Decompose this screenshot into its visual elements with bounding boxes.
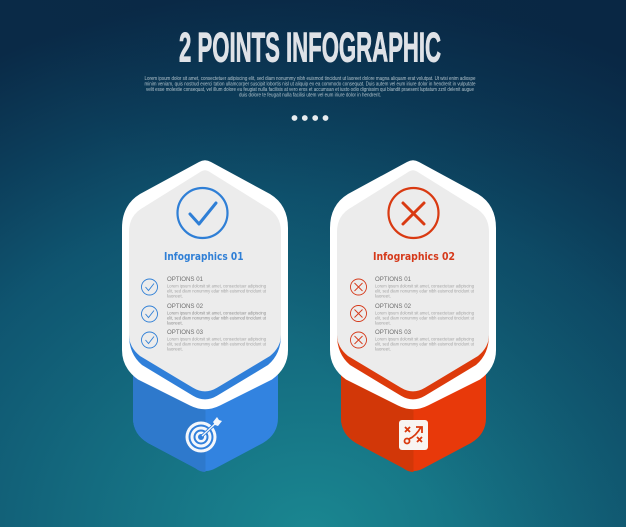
option 01: OPTIONS 01	[375, 276, 412, 283]
option 03	[142, 329, 267, 352]
option 03: laoreet.	[167, 346, 183, 352]
option 01	[142, 276, 267, 300]
option 01: Lorem ipsum dolorsit sit amet, consectetuer adipiscing	[167, 284, 266, 290]
option 02: Lorem ipsum dolorsit sit amet, consectetuer adipiscing	[375, 310, 474, 316]
option 01: laoreet.	[167, 294, 183, 300]
grey content panel	[337, 170, 489, 391]
option 03	[350, 329, 475, 352]
option 02: laoreet.	[167, 320, 183, 326]
option 02: OPTIONS 02	[375, 303, 412, 310]
white hexagon frame	[122, 160, 288, 409]
option 03: elit, sed diam nonummy edar nibh euismod tincidunt ut	[167, 342, 267, 348]
option 01	[350, 276, 475, 300]
option 02: laoreet.	[375, 320, 391, 326]
heading: Infographics 01	[164, 251, 244, 263]
option 03: Lorem ipsum dolorsit sit amet, consectetuer adipiscing	[375, 336, 474, 342]
intro paragraph: minim veniam, quis nostrud exerci tation ullamcorper suscipit lobortis nisl ut aliquip ex ea commodo consequat. Duis autem vel eum iriure dolor in hendrerit in vulputate	[144, 82, 476, 88]
icon: big cross circle	[388, 188, 438, 238]
blue base tab	[133, 340, 278, 472]
option 03: OPTIONS 03	[167, 329, 204, 336]
white hexagon frame	[330, 160, 496, 409]
option 01: Lorem ipsum dolorsit sit amet, consectetuer adipiscing	[375, 284, 474, 290]
red base tab	[341, 340, 486, 472]
option 01: elit, sed diam nonummy edar nibh euismod tincidunt ut	[167, 288, 267, 294]
heading: Infographics 02	[373, 251, 455, 263]
option 02: elit, sed diam nonummy edar nibh euismod tincidunt ut	[167, 316, 267, 322]
grey content panel	[129, 170, 281, 391]
option 02	[142, 303, 267, 326]
intro paragraph: velit esse molestie consequat, vel illum dolore eu feugiat nulla facilisis at vero eros et accumsan et iusto odio dignissim qui blandit praesent luptatum zzril delenit augue	[146, 87, 474, 93]
option 02	[350, 303, 475, 326]
option 01: OPTIONS 01	[167, 276, 204, 283]
intro paragraph: duis dolore te feugait nulla facilisi utem vel eum iriure dolor in hendrerit.	[239, 92, 381, 98]
icon: strategy board	[399, 420, 428, 450]
option 02: OPTIONS 02	[167, 303, 204, 310]
red under-strip	[337, 335, 489, 399]
option 01: elit, sed diam nonummy edar nibh euismod tincidunt ut	[375, 288, 475, 294]
option 03: elit, sed diam nonummy edar nibh euismod tincidunt ut	[375, 342, 475, 348]
blue under-strip	[129, 335, 281, 399]
icon: target with arrow	[186, 417, 222, 452]
option 01: laoreet.	[375, 294, 391, 300]
pagination dots	[292, 115, 328, 121]
option 03: Lorem ipsum dolorsit sit amet, consectetuer adipiscing	[167, 336, 266, 342]
option 02: elit, sed diam nonummy edar nibh euismod tincidunt ut	[375, 316, 475, 322]
panel: infographics 02	[330, 160, 496, 472]
intro paragraph: Lorem ipsum dolor sit amet, consectetuer adipiscing elit, sed diam nonummy nibh euismod tincidunt ut laoreet dolore magna aliquam erat volutpat. Ut wisi enim adiospe	[144, 76, 476, 82]
panel: infographics 01	[122, 160, 288, 472]
option 02: Lorem ipsum dolorsit sit amet, consectetuer adipiscing	[167, 310, 266, 316]
option 03: OPTIONS 03	[375, 329, 412, 336]
icon: big check circle	[178, 188, 228, 238]
intro paragraph	[144, 76, 476, 98]
option 03: laoreet.	[375, 346, 391, 352]
